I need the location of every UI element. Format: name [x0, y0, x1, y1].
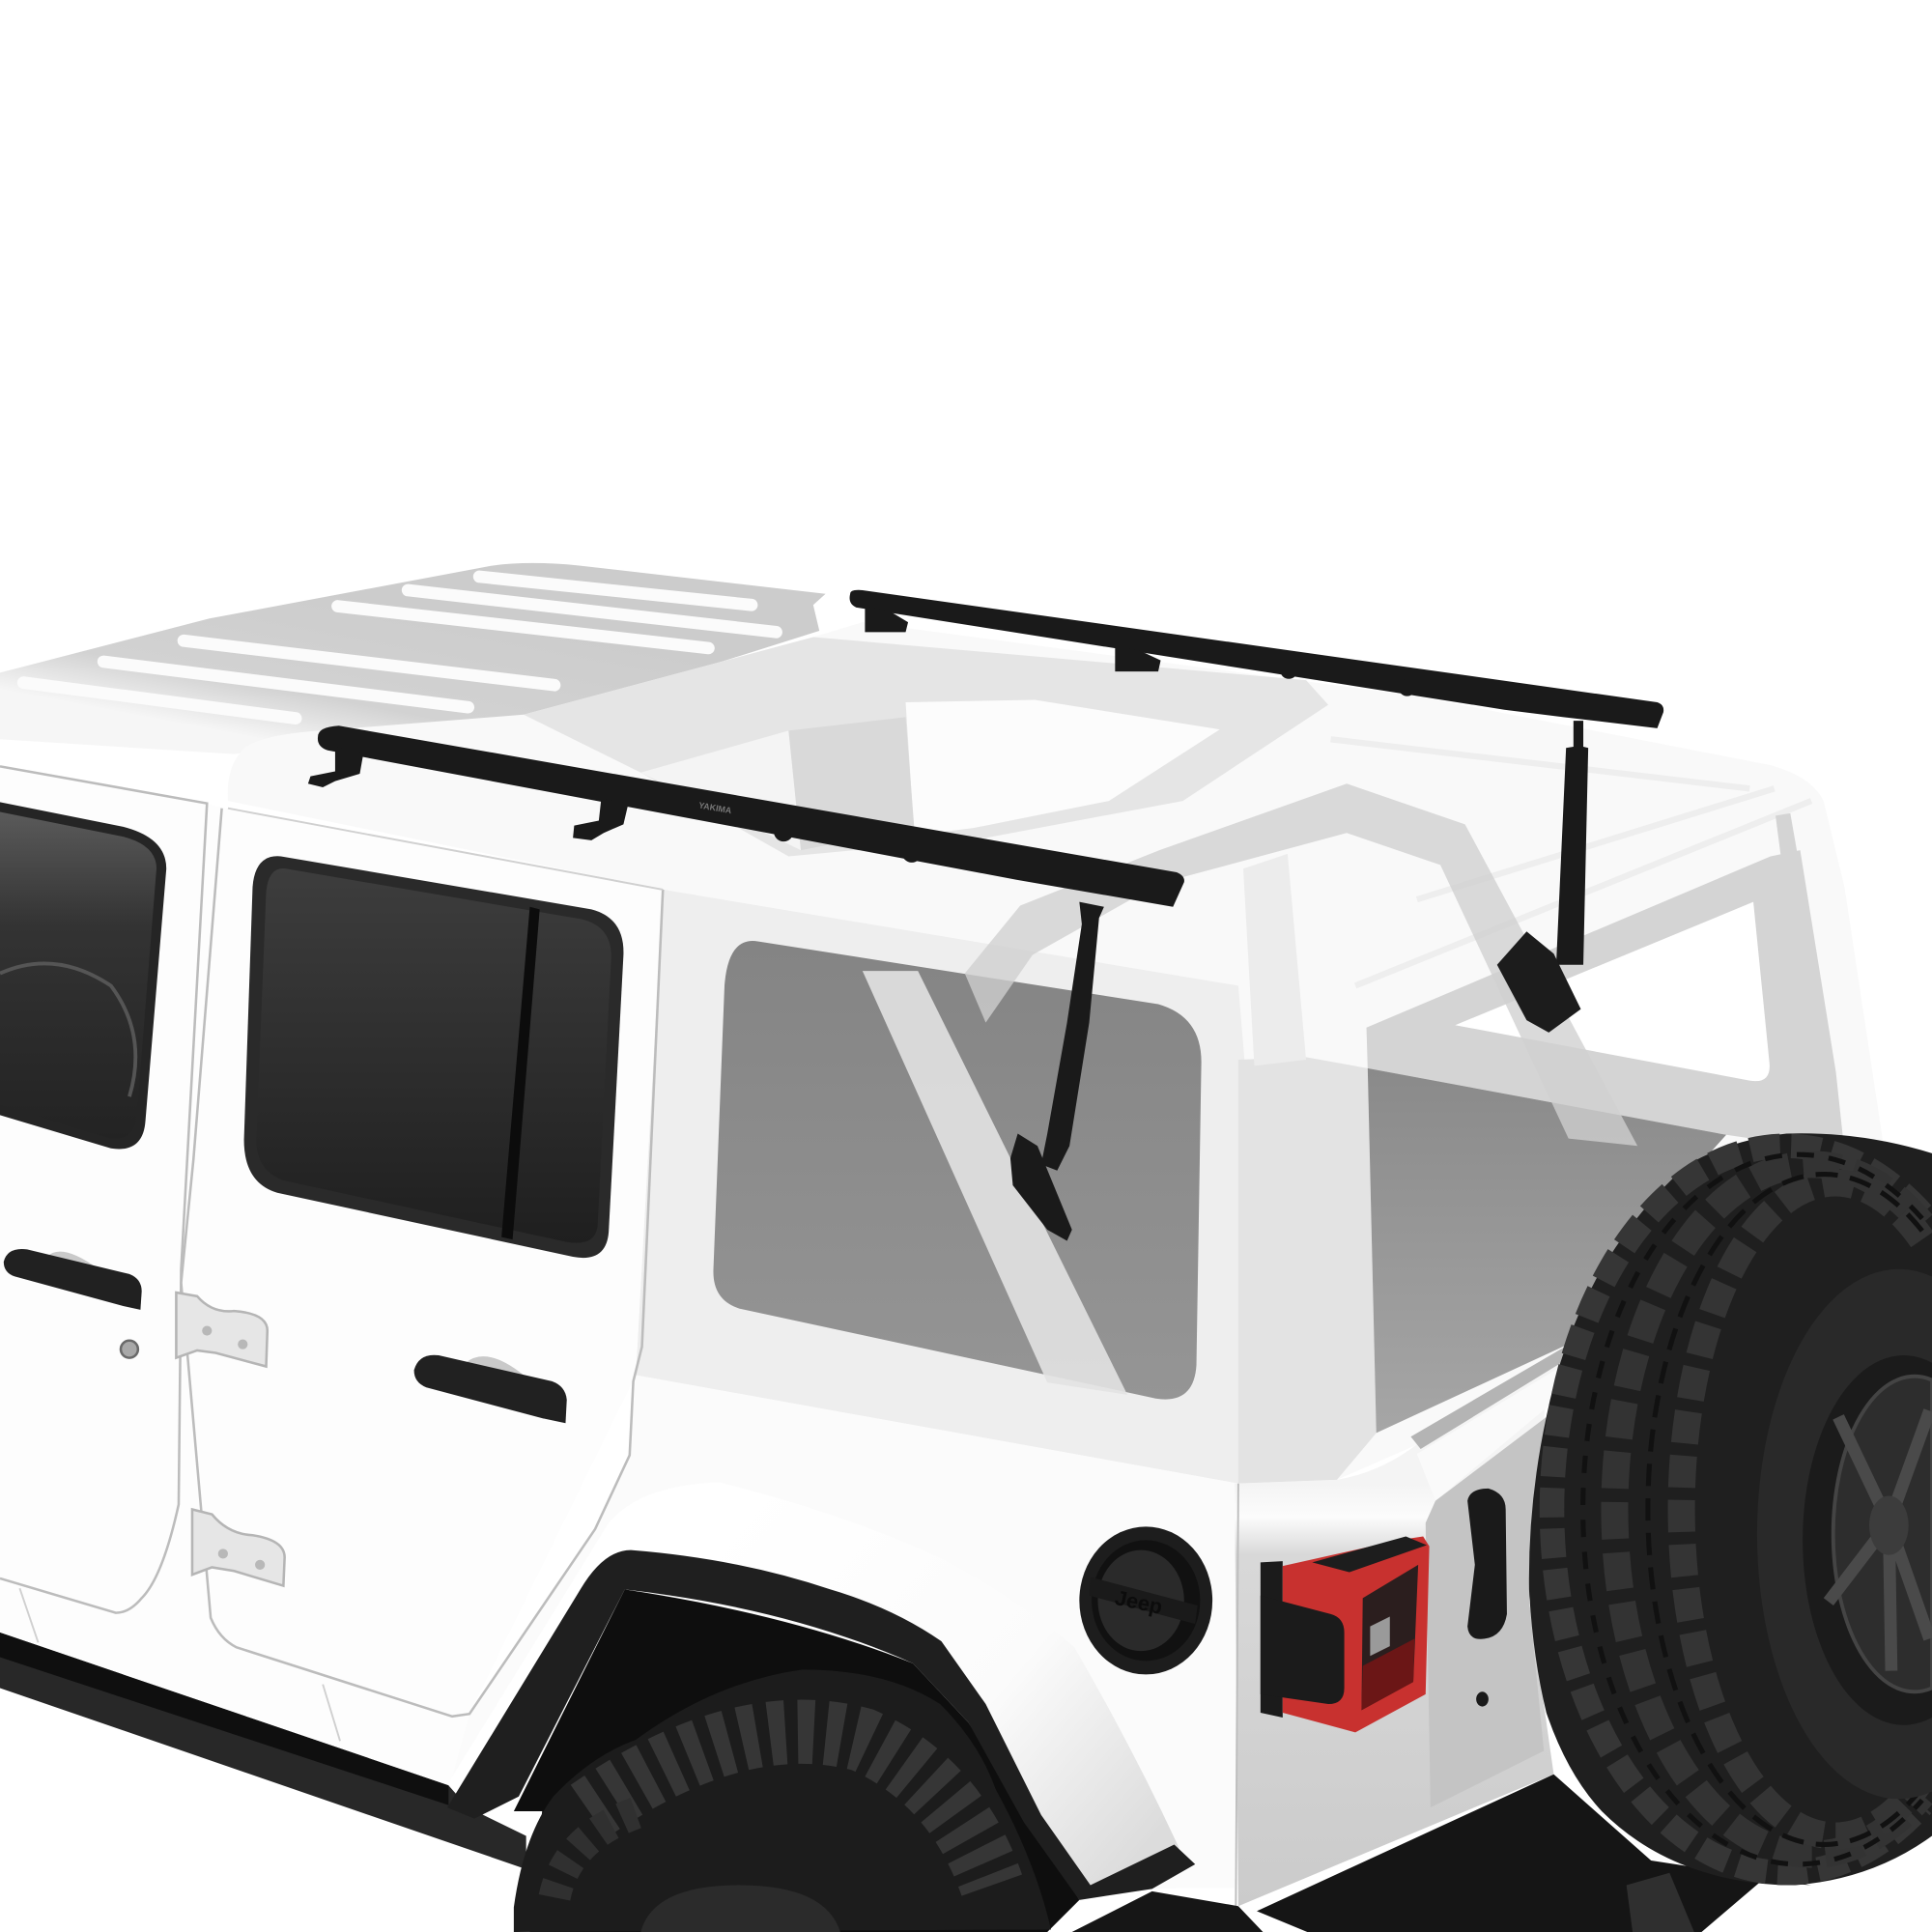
front wheel rim [640, 1886, 840, 1932]
seam at body corner [1236, 1484, 1238, 1906]
near rail clamps [308, 747, 629, 840]
rear cargo area, see-through [1368, 1068, 1726, 1433]
far mount plate [1497, 931, 1580, 1033]
door lock [121, 1341, 138, 1358]
rear door glass and hardware [244, 856, 623, 1423]
rear end panel [1235, 1342, 1574, 1906]
front door window [0, 802, 166, 1149]
near rail [318, 725, 1184, 907]
spare wheel rim [1803, 1355, 1932, 1725]
rear window frame and opening [1367, 813, 1844, 1152]
brand mark: YAKIMA [698, 800, 733, 815]
tail light [1261, 1537, 1430, 1732]
far rail [850, 590, 1663, 728]
fender [447, 1482, 1179, 1886]
front door handle [46, 1252, 99, 1269]
tailgate panel [1426, 1417, 1547, 1807]
spare tire [1529, 1133, 1932, 1886]
near strut [1041, 902, 1104, 1171]
tailgate latch [1467, 1489, 1507, 1639]
translucent rear hardtop [228, 622, 1887, 1484]
front door glass and hardware [0, 802, 166, 1358]
far roof rack [850, 590, 1663, 1033]
fuel cap [1079, 1526, 1212, 1674]
door seams [0, 766, 663, 1741]
shoulder trim [1410, 1342, 1574, 1449]
rear side window, see-through [713, 941, 1202, 1400]
roll bar, see-through [965, 783, 1637, 1146]
door and sill panels [0, 766, 663, 1785]
tail light black block [1261, 1596, 1345, 1704]
steering wheel [0, 963, 135, 1096]
near foot [1010, 1133, 1072, 1240]
rear quarter panel, see-through [636, 890, 1377, 1484]
front hardtop roof [0, 563, 826, 754]
fender flare [447, 1550, 1195, 1900]
front tire [514, 1669, 1051, 1932]
vehicle body [0, 766, 1574, 1906]
rear bumper [1072, 1775, 1811, 1932]
tail light lens [1361, 1565, 1418, 1710]
rear door window [244, 856, 623, 1258]
side step rail [0, 1633, 526, 1869]
shoulder highlight [1417, 1363, 1567, 1501]
spare tire sidewall [1757, 1269, 1932, 1799]
far rail clamps [865, 607, 1161, 671]
side body panel [452, 1375, 1238, 1889]
rear door handle [466, 1356, 524, 1375]
far strut [1556, 721, 1588, 965]
door hinges [176, 1293, 285, 1586]
wheel well [514, 1589, 1079, 1932]
near roof rack [308, 725, 1184, 1240]
fuel cap: Jeep [1113, 1585, 1165, 1619]
